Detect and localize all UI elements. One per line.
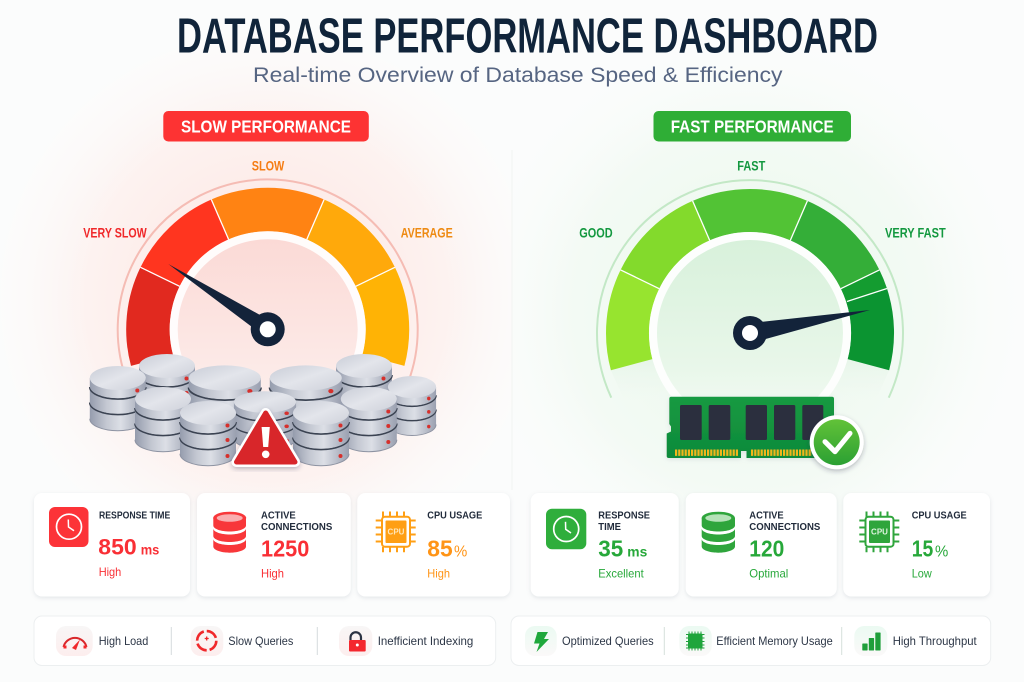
gauge inner disc: [657, 240, 843, 426]
icon: cpu orange: CPU: [388, 528, 405, 537]
icon: warning triangle: [236, 413, 295, 462]
icon: throughput bars: [854, 626, 887, 656]
gauge label: very slow: VERY SLOW: [83, 224, 147, 240]
card: cpu usage slow: CPU USAGE: [427, 509, 482, 521]
icon: lock: [339, 626, 372, 656]
card: response time fast: [531, 493, 679, 596]
badge: fast performance: FAST PERFORMANCE: [671, 116, 834, 136]
gauge label: very fast: VERY FAST: [885, 224, 946, 240]
panel: slow causes strip: Inefficient Indexing: [378, 634, 473, 648]
panel: fast benefits strip: [511, 616, 991, 666]
card: cpu usage fast: Low: [912, 567, 932, 581]
card: active connections slow: [197, 493, 351, 596]
badge: slow performance: [163, 111, 369, 142]
panel: slow causes strip: Slow Queries: [228, 634, 293, 648]
background glow: fast side: [512, 0, 1024, 682]
card: response time slow: RESPONSE TIME: [99, 509, 170, 521]
card: active connections slow: 1250: [261, 536, 309, 562]
icon: clock green: [546, 509, 586, 549]
needle: [733, 310, 870, 350]
card: response time fast: 35: [598, 536, 623, 562]
card: active connections fast: ACTIVE: [749, 509, 784, 521]
panel: fast benefits strip: High Throughput: [893, 634, 977, 648]
icon: lightning bolt: [525, 626, 557, 656]
panel: slow causes strip: High Load: [99, 634, 148, 648]
gauge segment: very slow upper: [141, 199, 229, 286]
gauge segment: fast: [693, 189, 807, 240]
badge: fast performance: [654, 111, 851, 142]
card: active connections slow: ACTIVE: [261, 509, 296, 521]
card: cpu usage fast: 15: [912, 536, 933, 562]
card: active connections fast: 120: [749, 536, 784, 562]
icon: memory chip: [679, 626, 712, 656]
database stacks: [90, 354, 436, 466]
panel: fast benefits strip: Efficient Memory Usage: [716, 634, 833, 648]
card: cpu usage slow: High: [427, 567, 450, 581]
badge: slow performance: SLOW PERFORMANCE: [181, 116, 351, 136]
icon: cpu green: CPU: [871, 528, 888, 537]
gauge segment: very fast lower: [846, 288, 894, 370]
gauge label: fast: FAST: [737, 158, 766, 174]
card: response time slow: [34, 493, 190, 596]
card: cpu usage fast: CPU USAGE: [912, 509, 967, 521]
gauge label: good: GOOD: [579, 224, 613, 240]
icon: RAM module: [667, 397, 834, 458]
gauge segment: slow: [211, 188, 324, 239]
card: cpu usage slow: 85: [427, 536, 453, 562]
card: response time slow: 850: [98, 534, 137, 559]
card: active connections fast: CONNECTIONS: [749, 521, 820, 533]
gauge label: slow: SLOW: [252, 158, 285, 174]
card: response time fast: RESPONSE: [598, 509, 650, 521]
card: response time fast: TIME: [598, 521, 621, 533]
gauge segment: good lower: [606, 270, 659, 370]
gauge inner disc: [178, 239, 358, 419]
icon: high load gauge: [56, 626, 93, 656]
gauge label: average: AVERAGE: [401, 224, 453, 240]
card: active connections fast: Optimal: [749, 567, 788, 581]
icon: database red: [213, 512, 246, 553]
card: cpu usage fast: %: [935, 544, 948, 561]
icon: cpu orange: [376, 512, 416, 552]
background glow: slow side: [0, 0, 512, 682]
card: active connections slow: CONNECTIONS: [261, 521, 332, 533]
panel: fast benefits strip: Optimized Queries: [562, 634, 654, 648]
icon: cpu green: [859, 512, 899, 552]
needle: [168, 264, 285, 346]
gauge segment: average lower: [356, 267, 409, 366]
icon: clock red: [49, 507, 88, 547]
gauge segment: good upper: [621, 201, 710, 289]
gauge segment: fast right: [790, 201, 879, 289]
panel: slow causes strip: [34, 616, 496, 666]
card: response time fast: ms: [627, 544, 648, 560]
subtitle: Real-time Overview of Database Speed & Efficiency: [253, 63, 783, 87]
card: active connections fast: [686, 493, 837, 596]
gauge: slow performance: [118, 179, 418, 427]
icon: database green: [702, 512, 735, 553]
card: response time fast: Excellent: [598, 567, 644, 581]
card: active connections slow: High: [261, 567, 284, 581]
card: cpu usage slow: %: [454, 544, 467, 561]
card: response time slow: ms: [141, 541, 159, 557]
gauge: fast performance: [597, 180, 903, 434]
icon: slow queries target: [191, 626, 223, 656]
gauge segment: very slow lower: [126, 267, 180, 366]
gauge segment: average upper: [307, 199, 395, 286]
icon: check badge: [810, 415, 864, 469]
gauge segment: very fast upper: [841, 270, 887, 302]
card: response time slow: High: [99, 565, 121, 579]
card: cpu usage fast: [843, 493, 990, 596]
card: cpu usage slow: [357, 493, 510, 596]
